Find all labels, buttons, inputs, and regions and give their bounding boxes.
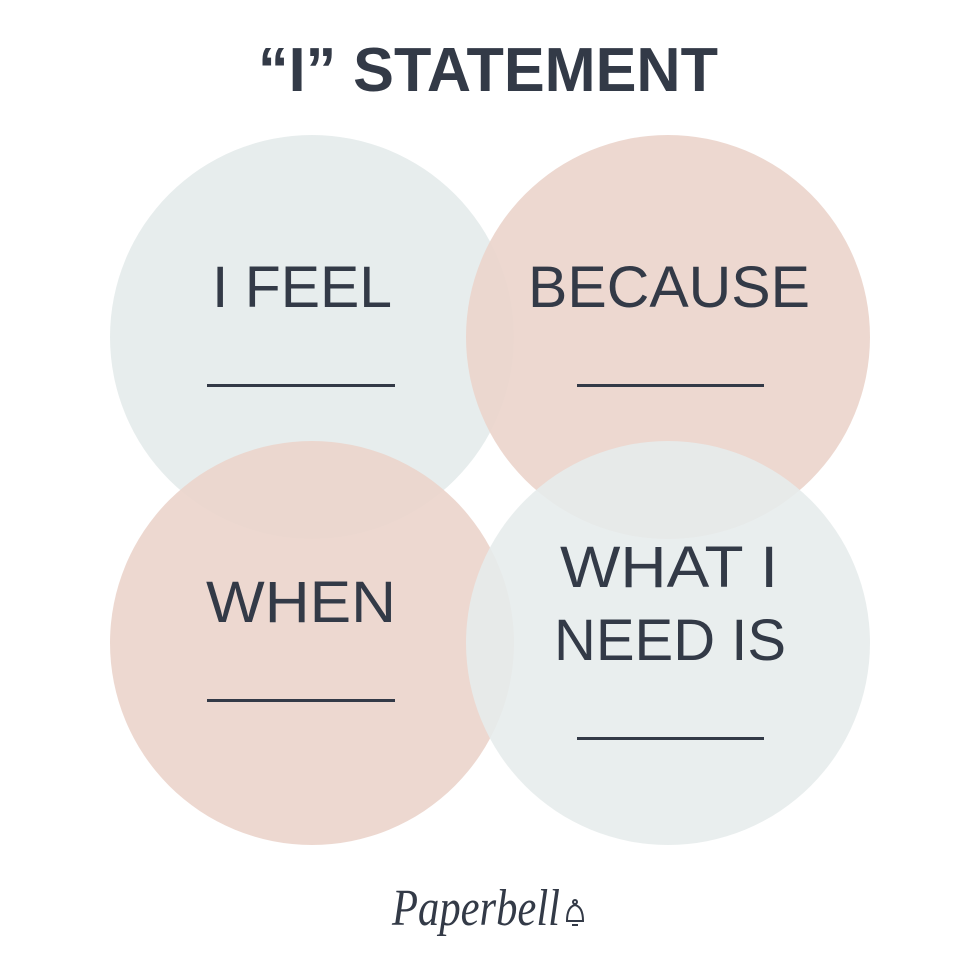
text: what I need is bbox=[554, 535, 786, 740]
text: when bbox=[206, 570, 396, 702]
text: when: WHEN bbox=[206, 570, 396, 635]
circle: when bbox=[110, 441, 514, 845]
text: because: BECAUSE bbox=[528, 255, 810, 320]
icon: bell bbox=[567, 900, 583, 925]
circle: because bbox=[466, 135, 870, 539]
text: what I need is: NEED IS bbox=[554, 608, 786, 673]
circle: what I need is bbox=[466, 441, 870, 845]
text: what I need is: WHAT I bbox=[560, 535, 778, 600]
text: I feel: I FEEL bbox=[212, 255, 392, 320]
text: I feel bbox=[207, 255, 395, 387]
logo: Paperbell: Paperbell bbox=[391, 880, 560, 937]
title: “I” STATEMENT bbox=[258, 36, 718, 105]
text: because bbox=[528, 255, 810, 387]
circle: I feel bbox=[110, 135, 514, 539]
